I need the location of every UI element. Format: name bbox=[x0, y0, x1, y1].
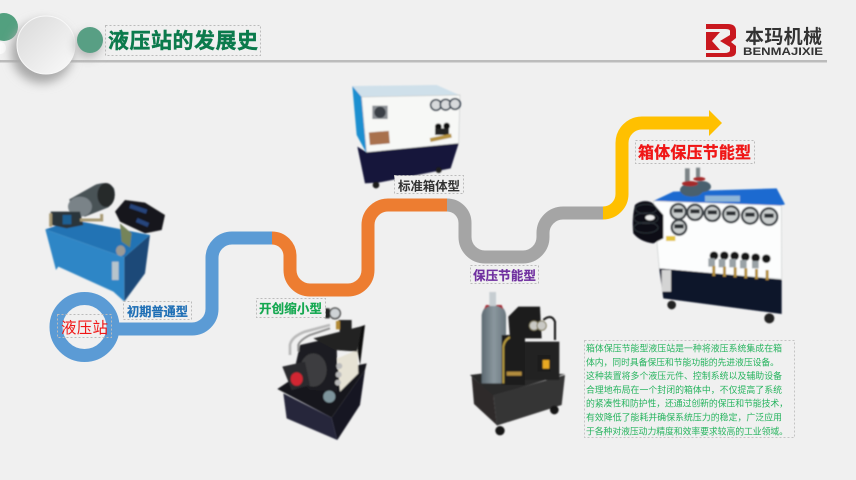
label: standard cabinet type bbox=[394, 176, 464, 194]
orange segment bbox=[272, 205, 447, 290]
description text block: 箱体保压节能型液压站是一种将液压系统集成在箱 bbox=[586, 342, 782, 354]
title: 液压站的发展史 bbox=[108, 30, 258, 53]
description text block: 这种装置将多个液压元件、控制系统以及辅助设备 bbox=[586, 370, 782, 381]
label: pressure-saving type: 保压节能型 bbox=[473, 268, 536, 283]
label: standard cabinet type: 标准箱体型 bbox=[398, 178, 460, 194]
label: hydraulic station: 液压站 bbox=[61, 319, 108, 337]
machine: early standard unit bbox=[45, 183, 165, 302]
label: compact type: 开创缩小型 bbox=[259, 301, 322, 316]
machine: cabinet pressure-saving unit bbox=[633, 168, 785, 323]
description text block: 合理地布局在一个封闭的箱体中，不仅提高了系统 bbox=[586, 384, 782, 395]
blue start ring bbox=[56, 298, 113, 356]
icon: red B mark bbox=[706, 24, 736, 57]
description text block: 有效降低了能耗并确保系统压力的稳定，广泛应用 bbox=[586, 412, 782, 422]
logo wordmark: BENMAJIXIE bbox=[743, 46, 823, 58]
label: early standard type bbox=[124, 302, 192, 320]
yellow arrow bbox=[603, 110, 722, 213]
gray segment bbox=[447, 205, 603, 257]
header decoration bbox=[0, 13, 827, 83]
logo wordmark bbox=[743, 26, 823, 58]
description text block: 体内，同时具备保压和节能功能的先进液压设备。 bbox=[586, 356, 779, 367]
label: compact type bbox=[256, 298, 326, 318]
description text block: 的紧凑性和防护性，还通过创新的保压和节能技术， bbox=[586, 398, 788, 409]
label: early standard type: 初期普通型 bbox=[127, 304, 188, 319]
machine: pressure-saving unit bbox=[470, 292, 565, 435]
timeline path bbox=[56, 110, 722, 356]
description text block: 于各种对液压动力精度和效率要求较高的工业领域。 bbox=[586, 425, 788, 436]
logo wordmark: 本玛机械 bbox=[745, 26, 822, 48]
machine: compact unit bbox=[277, 308, 367, 440]
logo bbox=[706, 24, 823, 58]
label: hydraulic station bbox=[58, 314, 112, 338]
description text block bbox=[584, 340, 794, 438]
blue segment bbox=[112, 238, 272, 329]
machine: standard cabinet bbox=[352, 85, 461, 188]
label: cabinet pressure-saving type: 箱体保压节能型 bbox=[638, 143, 751, 162]
